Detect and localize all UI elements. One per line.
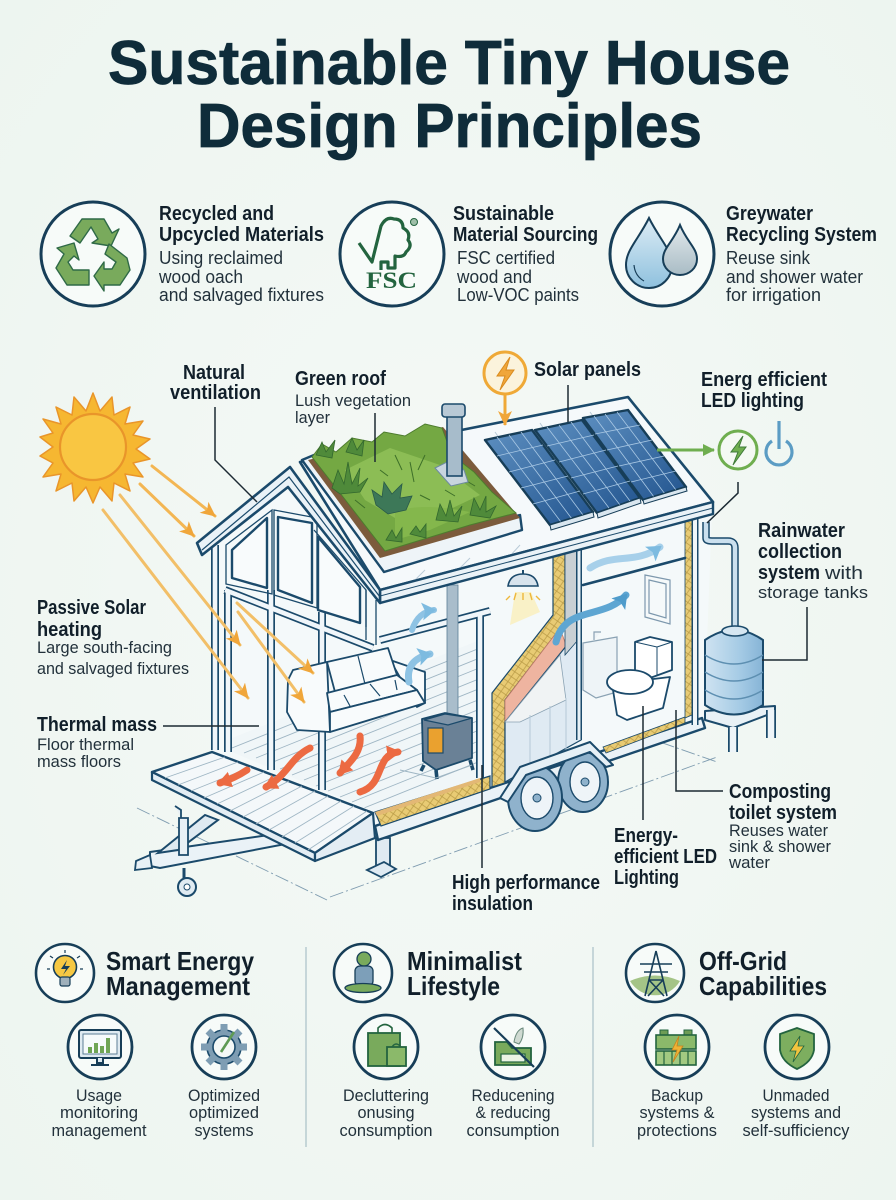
text: greywater: Recycling System <box>726 224 877 246</box>
text: recycled materials <box>158 203 324 305</box>
icon: shield <box>765 1015 829 1079</box>
mirror <box>645 575 670 624</box>
trailer chassis and hitch <box>135 718 705 896</box>
icon: battery <box>645 1015 709 1079</box>
text: greywater: Greywater <box>726 203 813 225</box>
label: green roof: Green roof <box>295 368 386 390</box>
heading: Capabilities <box>699 971 827 1001</box>
text: greywater <box>726 203 877 305</box>
sub labels: Optimized <box>188 1086 260 1105</box>
divider <box>306 947 593 1147</box>
label: energy-efficient LED: efficient LED <box>614 846 717 868</box>
text: material sourcing: Low-VOC paints <box>457 285 579 305</box>
heading: Smart Energy <box>106 946 254 976</box>
label: composting toilet: Composting <box>729 781 831 803</box>
sub labels: optimized <box>189 1103 259 1122</box>
sub labels: systems <box>194 1121 254 1140</box>
stabilizer foot <box>367 838 396 877</box>
sun <box>40 393 150 503</box>
title: Sustainable Tiny House <box>108 29 790 98</box>
label: thermal mass <box>37 714 259 771</box>
gable fascia <box>197 467 380 603</box>
text: recycled materials: Using reclaimed <box>159 248 283 268</box>
sub labels: Unmaded <box>762 1086 830 1105</box>
sub labels: consumption <box>340 1121 432 1140</box>
icon: water drops <box>610 202 714 306</box>
label: solar panels <box>534 359 641 422</box>
label: rainwater: system <box>758 562 820 584</box>
sub labels: Usage <box>76 1086 122 1105</box>
pendant lamp <box>506 570 540 625</box>
ground plan lines <box>137 735 717 900</box>
heading <box>106 946 254 1001</box>
label: green roof: layer <box>295 408 330 427</box>
panel: recycled materials <box>41 202 324 306</box>
text: recycled materials: Upcycled Materials <box>159 224 324 246</box>
sub labels <box>340 1086 560 1140</box>
icon: FSC: FSC <box>366 268 417 293</box>
label: energy-efficient LED <box>614 706 717 889</box>
sub labels: & reducing <box>476 1103 550 1122</box>
sub labels <box>52 1086 260 1140</box>
label: thermal mass: mass floors <box>37 752 121 771</box>
label: rainwater <box>758 520 868 660</box>
label: passive solar <box>37 597 189 678</box>
panel: greywater <box>610 202 877 306</box>
floor insulation strip <box>375 717 685 826</box>
interior floor <box>232 649 476 808</box>
label: insulation <box>452 765 600 915</box>
label: thermal mass: Floor thermal <box>37 735 134 754</box>
wood stove <box>400 585 473 779</box>
heading: Minimalist <box>407 946 522 976</box>
sub labels: Decluttering <box>343 1086 429 1105</box>
front wall frame <box>215 510 490 790</box>
heading: Management <box>106 971 250 1001</box>
panel: smart energy <box>36 944 260 1140</box>
title <box>108 29 790 161</box>
label: green roof: Lush vegetation <box>295 391 411 410</box>
label: rainwater: with <box>824 563 863 583</box>
icon: declutter <box>481 1015 545 1079</box>
icon: LED energy <box>657 431 757 469</box>
sub labels <box>637 1086 850 1140</box>
icon: pylon <box>626 944 684 1002</box>
label: passive solar: heating <box>37 619 102 641</box>
icon: bulb <box>36 944 94 1002</box>
label: insulation: High performance <box>452 872 600 894</box>
text: material sourcing: FSC certified <box>457 248 555 268</box>
interior background <box>212 470 712 826</box>
text: material sourcing: Sustainable <box>453 203 554 225</box>
icon: solar energy <box>484 352 526 425</box>
label: insulation: insulation <box>452 893 533 915</box>
chimney <box>435 404 468 486</box>
icon: shopping bags <box>354 1015 418 1079</box>
label: rainwater: collection <box>758 541 842 563</box>
sub labels: consumption <box>466 1121 560 1140</box>
text: greywater: for irrigation <box>726 285 821 305</box>
sub labels: self-sufficiency <box>742 1121 850 1140</box>
icon: recycle <box>41 202 145 306</box>
label: rainwater: Rainwater <box>758 520 845 542</box>
label: solar panels: Solar panels <box>534 359 641 381</box>
label: energy-efficient LED: Energy- <box>614 825 678 847</box>
text: recycled materials: and salvaged fixtures <box>159 285 324 305</box>
label: green roof <box>295 368 411 462</box>
label: composting toilet: water <box>728 853 770 872</box>
label: rainwater: storage tanks <box>758 583 868 602</box>
green roof <box>302 404 522 572</box>
label: composting toilet: Reuses water <box>729 821 828 840</box>
label: LED lighting: LED lighting <box>701 390 804 412</box>
label: passive solar: and salvaged fixtures <box>37 659 189 678</box>
label: natural ventilation: ventilation <box>170 382 261 404</box>
icon: power <box>766 421 792 465</box>
eave band <box>380 502 713 603</box>
text: material sourcing <box>453 203 598 305</box>
icon: FSC <box>340 202 444 306</box>
text: recycled materials: wood oach <box>158 267 243 287</box>
vanity <box>583 632 617 698</box>
text: material sourcing: wood and <box>456 267 532 287</box>
deck <box>152 752 375 861</box>
icon: gear <box>192 1015 256 1079</box>
sub labels: Backup <box>651 1086 703 1105</box>
label: natural ventilation: Natural <box>183 362 245 384</box>
label: composting toilet <box>676 710 837 872</box>
text: greywater: and shower water <box>726 267 863 287</box>
solar panels <box>485 410 687 530</box>
bathroom <box>579 514 695 740</box>
toilet <box>607 637 672 720</box>
sub labels: systems & <box>640 1103 715 1122</box>
label: composting toilet: sink & shower <box>729 837 831 856</box>
sub labels: systems and <box>751 1103 841 1122</box>
icon: meditating person <box>334 944 392 1002</box>
label: natural ventilation <box>170 362 261 502</box>
text: recycled materials: Recycled and <box>159 203 274 225</box>
label: passive solar: Passive Solar <box>37 597 146 619</box>
house illustration <box>40 352 792 900</box>
floor heat arrows <box>220 736 398 792</box>
label: energy-efficient LED: Lighting <box>614 867 679 889</box>
sofa <box>287 648 425 732</box>
sub labels: Reducening <box>472 1086 554 1105</box>
panel: material sourcing <box>340 202 598 306</box>
roof <box>197 397 713 603</box>
label: LED lighting: Energ efficient <box>701 369 827 391</box>
heading <box>407 946 522 1001</box>
label: LED lighting <box>701 369 827 523</box>
title: Design Principles <box>197 92 702 161</box>
sub labels: management <box>52 1121 147 1140</box>
label: thermal mass: Thermal mass <box>37 714 157 736</box>
heading <box>699 946 827 1001</box>
sunlight arrows <box>103 466 313 702</box>
air flow arrows <box>408 547 660 682</box>
label: passive solar: Large south-facing <box>37 638 172 657</box>
sub labels: monitoring <box>60 1103 138 1122</box>
plants <box>316 438 496 542</box>
icon: monitor <box>68 1015 132 1079</box>
panel: off-grid <box>626 944 850 1140</box>
cutaway wall insulation <box>492 516 692 787</box>
gable windows <box>232 517 360 623</box>
sub labels: protections <box>637 1121 717 1140</box>
panel: minimalist lifestyle <box>334 944 560 1140</box>
label: composting toilet: toilet system <box>729 802 837 824</box>
sub labels: onusing <box>358 1103 414 1122</box>
heading: Off-Grid <box>699 946 787 976</box>
heading: Lifestyle <box>407 971 500 1001</box>
text: greywater: Reuse sink <box>726 248 811 268</box>
hitch jack <box>175 806 196 896</box>
text: material sourcing: Material Sourcing <box>453 224 598 246</box>
wheels and fender <box>500 742 613 831</box>
rain barrel and downspout <box>705 522 775 752</box>
